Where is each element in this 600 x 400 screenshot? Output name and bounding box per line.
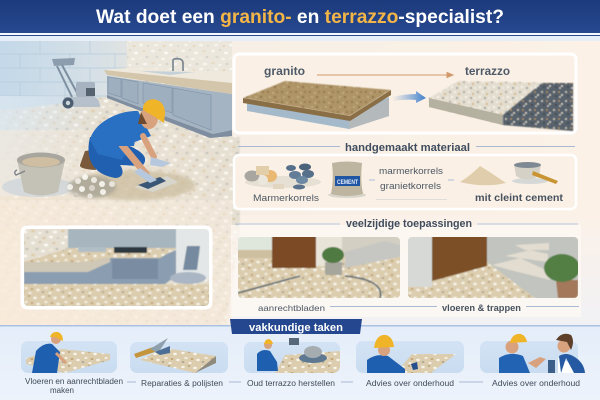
label: aanrechtbladen: aanrechtbladen <box>258 303 325 313</box>
badge: vakkundige taken <box>230 319 362 334</box>
cement bucket <box>2 152 74 197</box>
worker in blue with yellow helmet <box>80 99 178 192</box>
floor polishing machine <box>52 58 100 108</box>
arrow: blue <box>392 91 426 103</box>
icon: mixing bowl and trowel <box>512 162 558 184</box>
label: terrazzo: terrazzo <box>465 66 510 78</box>
task: floors and countertops <box>21 332 123 395</box>
lower floor <box>24 284 209 306</box>
panel: materials <box>234 155 576 209</box>
cabinets <box>24 250 176 284</box>
kitchen counter <box>104 59 232 138</box>
task: restoring old terrazzo: Oud terrazzo herstellen <box>247 379 335 388</box>
terrazzo floor <box>0 97 240 330</box>
task: maintenance advice: Advies over onderhoud <box>366 379 454 388</box>
task: repairs and polishing: Reparaties & polijsten <box>141 379 223 388</box>
task: maintenance advice with client: Advies over onderhoud <box>492 379 580 388</box>
task: floors and countertops: Vloeren en aanrechtbladen <box>25 377 123 386</box>
band: skilled tasks <box>0 319 600 400</box>
photo: terrazzo floor with door <box>238 237 400 298</box>
label: marmerkorrels and granietkorrels: marmerkorrels <box>379 166 444 176</box>
label: granito: granito <box>264 66 305 78</box>
wall with tiles <box>0 40 232 110</box>
counter top <box>20 248 177 263</box>
badge: vakkundige taken: vakkundige taken <box>249 322 343 334</box>
icon: cement bag <box>328 162 366 198</box>
task: maintenance advice <box>356 335 464 388</box>
label: mit cleint cement: mit cleint cement <box>475 193 564 204</box>
heading: veelzijdige toepassingen: veelzijdige toepassingen <box>346 218 472 230</box>
title: Wat doet een granito- en terrazzo-specialist? <box>96 7 504 28</box>
icon: cement bag: CEMENT <box>337 179 358 186</box>
title bar <box>0 0 600 41</box>
label: Marmerkorrels: Marmerkorrels <box>253 193 320 203</box>
polishing machine <box>183 246 200 270</box>
task: restoring old terrazzo <box>244 338 340 388</box>
photo: terrazzo stairs with door <box>408 237 578 298</box>
arrow: orange line <box>317 72 453 78</box>
task: repairs and polishing <box>130 338 228 388</box>
label: marmerkorrels and granietkorrels: granietkorrels <box>380 181 442 191</box>
icon: sand pile <box>460 166 506 185</box>
terrazzo slab <box>429 81 573 131</box>
scene: worker laying terrazzo floor <box>0 40 240 330</box>
granito slab <box>243 81 391 129</box>
icon: marble and granite stones <box>244 164 321 190</box>
panel: kitchen photo <box>20 225 215 310</box>
task: maintenance advice with client <box>480 334 585 388</box>
label: vloeren & trappen: vloeren & trappen <box>442 303 521 313</box>
worked patch and loose stones <box>67 170 195 200</box>
panel: versatile applications <box>231 218 582 317</box>
label: marmerkorrels and granietkorrels <box>369 166 454 200</box>
task: floors and countertops: maken <box>50 386 74 395</box>
panel: granito to terrazzo <box>234 54 576 133</box>
heading: handgemaakt materiaal: handgemaakt materiaal <box>345 142 470 154</box>
